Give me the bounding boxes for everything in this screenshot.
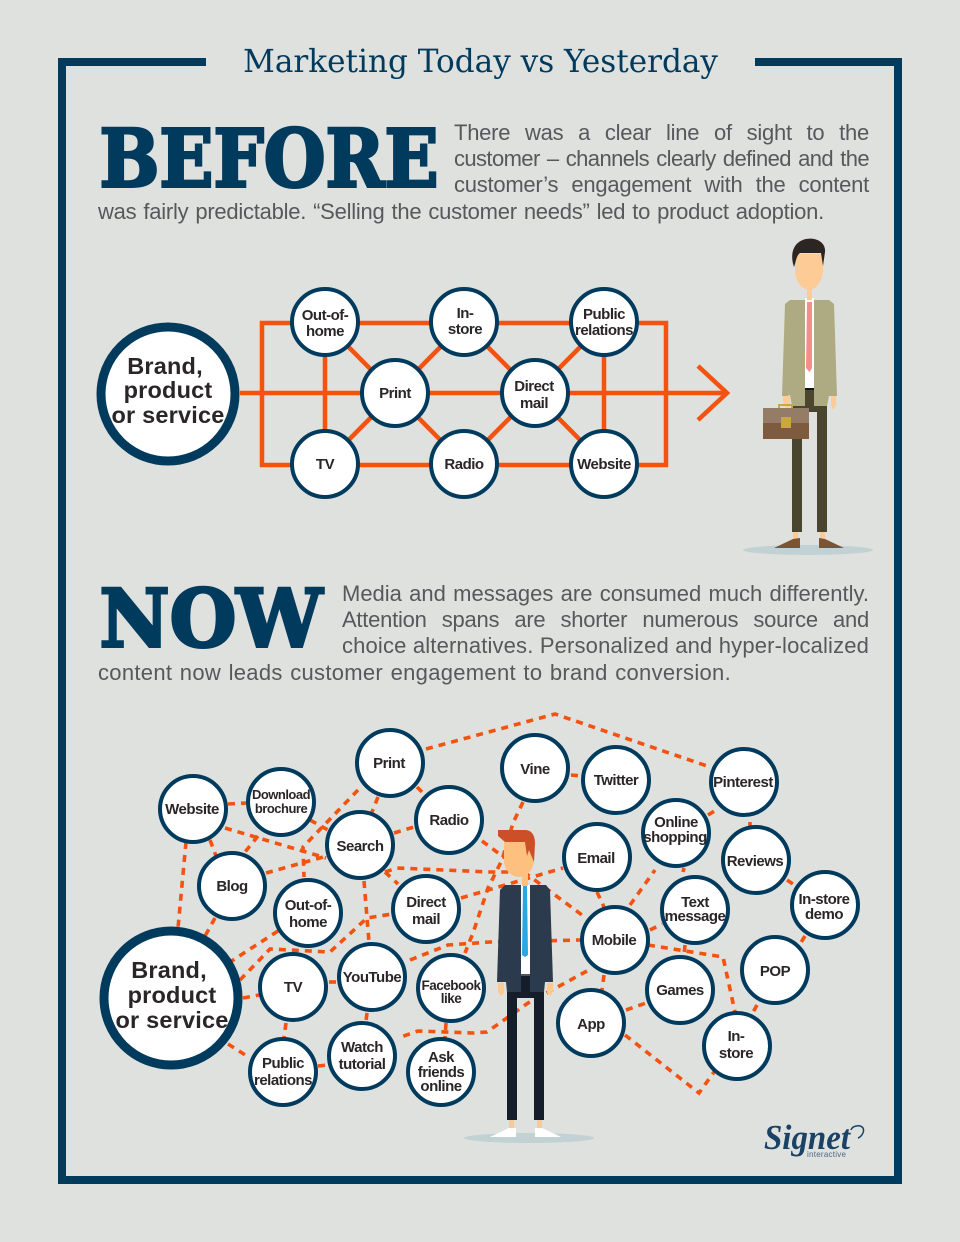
node: direct mail: Direct (514, 378, 554, 395)
node: public relations (250, 1039, 316, 1105)
node: search: Search (336, 838, 384, 855)
hub: brand, product or service: or service (111, 402, 225, 428)
hub: brand, product or service (104, 931, 238, 1065)
node: in-store demo: In-store (798, 891, 850, 908)
node: download brochure: brochure (255, 801, 307, 816)
node: TV: TV (316, 456, 335, 473)
node: twitter: Twitter (594, 772, 639, 789)
node: search (327, 812, 393, 878)
node: website: Website (165, 801, 219, 818)
text block: now description (98, 581, 869, 685)
node: blog: Blog (216, 878, 248, 895)
node: watch tutorial: Watch (341, 1039, 383, 1056)
node: reviews: Reviews (727, 853, 783, 870)
node: in-store: store (448, 321, 482, 338)
text block: before description: customer – channels clearly defined and the (454, 146, 869, 171)
node: text message: message (665, 908, 726, 925)
figure: man with briefcase (743, 239, 873, 555)
node: direct mail: Direct (406, 894, 446, 911)
node: email: Email (577, 850, 615, 867)
node: pinterest (711, 749, 777, 815)
text block: before description (98, 120, 870, 224)
page frame (62, 62, 898, 1180)
node: in-store: In- (457, 305, 474, 322)
text block: before description: was fairly predictable. “Selling the customer needs” led to product adoption. (98, 199, 824, 224)
node: in-store demo: demo (805, 906, 843, 923)
figure: man in suit (464, 830, 594, 1143)
node: games: Games (656, 982, 704, 999)
node: facebook like: like (441, 991, 462, 1006)
scattered dashed connections (178, 714, 805, 1093)
node: print: Print (373, 755, 405, 772)
diagram: now channels (104, 714, 858, 1105)
logo: Signet interactive: Signet (764, 1118, 851, 1157)
node: print: Print (379, 385, 411, 402)
heading: NOW: NOW (100, 572, 324, 666)
text block: now description: Attention spans are shorter numerous source and (342, 607, 869, 632)
node: reviews (723, 827, 789, 893)
node: website (160, 776, 226, 842)
node: download brochure (248, 769, 314, 835)
node: mobile (582, 907, 648, 973)
node: facebook like: Facebook (421, 978, 481, 993)
node: public relations (571, 289, 637, 355)
node: watch tutorial (329, 1023, 395, 1089)
node: radio (416, 787, 482, 853)
node: POP: POP (760, 963, 791, 980)
node: in-store: In- (728, 1028, 745, 1045)
node: in-store (704, 1013, 770, 1079)
node: text message (662, 877, 728, 943)
node: public relations: relations (254, 1072, 312, 1089)
node: facebook like (418, 955, 484, 1021)
text block: now description: content now leads customer engagement to brand conversion. (98, 660, 731, 685)
node: out-of-home: home (306, 323, 344, 340)
hub: brand, product or service: Brand, (131, 957, 207, 983)
node: out-of-home: home (289, 914, 327, 931)
node: ask friends online (408, 1039, 474, 1105)
node: pinterest: Pinterest (713, 774, 773, 791)
node: app: App (577, 1016, 605, 1033)
node: games (647, 957, 713, 1023)
node: radio (431, 431, 497, 497)
text block: before description: customer’s engagement with the content (454, 172, 869, 197)
node: print (362, 360, 428, 426)
node: mobile: Mobile (592, 932, 636, 949)
node: watch tutorial: tutorial (339, 1056, 386, 1073)
hub: brand, product or service: or service (115, 1007, 229, 1033)
node: out-of-home: Out-of- (302, 307, 349, 324)
node: website (571, 431, 637, 497)
text block: now description: choice alternatives. Personalized and hyper-localized (342, 633, 869, 658)
node: out-of-home: Out-of- (285, 897, 332, 914)
node: website: Website (577, 456, 631, 473)
text block: now description: Media and messages are consumed much differently. (342, 581, 869, 606)
node: twitter (583, 747, 649, 813)
node: public relations: Public (583, 306, 625, 323)
node: radio: Radio (429, 812, 469, 829)
node: text message: Text (681, 894, 709, 911)
node: POP (742, 937, 808, 1003)
node: vine (502, 735, 568, 801)
node: radio: Radio (444, 456, 484, 473)
hub: brand, product or service: product (124, 377, 212, 403)
node: direct mail (502, 360, 568, 426)
node: direct mail: mail (412, 911, 440, 928)
hub: brand, product or service (101, 327, 235, 461)
node: direct mail (393, 876, 459, 942)
node: online shopping: Online (654, 814, 698, 831)
node: out-of-home (292, 289, 358, 355)
node: blog (199, 853, 265, 919)
diagram: before channels (101, 289, 727, 497)
node: download brochure: Download (252, 787, 311, 802)
node: vine: Vine (520, 761, 550, 778)
logo: Signet interactive: interactive (807, 1150, 847, 1159)
node: ask friends online: online (420, 1078, 462, 1095)
node: in-store demo (792, 872, 858, 938)
node: public relations: Public (262, 1055, 304, 1072)
node: TV (292, 431, 358, 497)
node: email (564, 824, 630, 890)
hub: brand, product or service: Brand, (127, 353, 203, 379)
node: YouTube: YouTube (343, 969, 401, 986)
node: TV: TV (284, 979, 303, 996)
node: in-store (431, 289, 497, 355)
hub: brand, product or service: product (128, 982, 216, 1008)
node: TV (260, 954, 326, 1020)
node: YouTube (339, 944, 405, 1010)
node: app (558, 990, 624, 1056)
title: Marketing Today vs Yesterday (243, 42, 718, 80)
node: in-store: store (719, 1045, 753, 1062)
node: online shopping (643, 800, 709, 866)
node: print (357, 730, 423, 796)
orderly connecting lines (240, 323, 727, 465)
node: ask friends online: Ask (428, 1049, 455, 1066)
node: online shopping: shopping (643, 829, 707, 846)
text block: before description: There was a clear line of sight to the (454, 120, 869, 145)
node: out-of-home (275, 880, 341, 946)
node: ask friends online: friends (418, 1064, 464, 1081)
heading: BEFORE: BEFORE (100, 112, 438, 206)
node: public relations: relations (575, 322, 633, 339)
node: direct mail: mail (520, 395, 548, 412)
